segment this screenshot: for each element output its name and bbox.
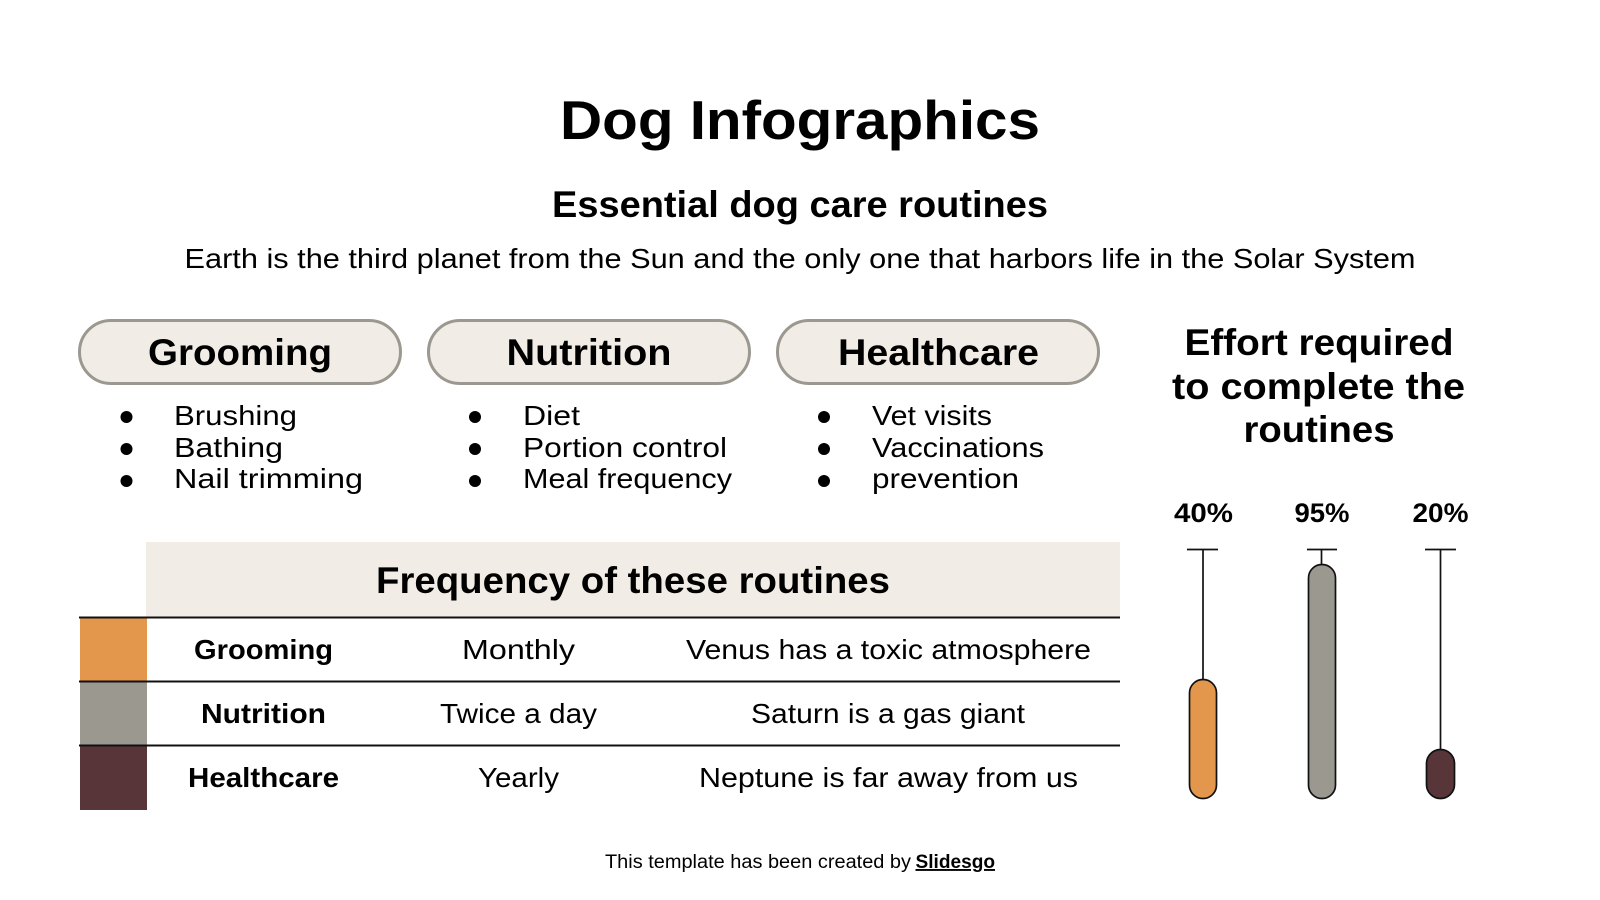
- subtitle: Essential dog care routines: [552, 184, 1048, 225]
- panel: healthcare: [778, 320, 1098, 494]
- row: healthcare: Neptune is far away from us: [699, 762, 1078, 793]
- gauge: healthcare 20%: [1412, 498, 1468, 798]
- heading: effort required: [1172, 322, 1465, 450]
- description: Earth is the third planet from the Sun and the only one that harbors life in the Solar System: [184, 243, 1416, 274]
- list: grooming tasks: Bathing: [174, 432, 283, 463]
- row: nutrition: Nutrition: [201, 698, 326, 729]
- list: nutrition tasks: Meal frequency: [523, 463, 732, 494]
- title: Dog Infographics: [560, 89, 1040, 151]
- gauge: nutrition 95%: [1294, 498, 1350, 798]
- gauge: healthcare 20%: 20%: [1412, 498, 1468, 528]
- pill: healthcare: Healthcare: [838, 332, 1039, 373]
- panel: grooming: [80, 320, 400, 494]
- row: grooming: [194, 634, 1091, 665]
- row: nutrition: Twice a day: [440, 698, 597, 729]
- heading: effort required: routines: [1244, 409, 1394, 450]
- row: healthcare: Yearly: [478, 762, 559, 793]
- list: grooming tasks: Nail trimming: [174, 463, 363, 494]
- footer credit: This template has been created by: [605, 852, 912, 873]
- gauge: nutrition 95%: 95%: [1294, 498, 1350, 528]
- row: nutrition: Saturn is a gas giant: [751, 698, 1025, 729]
- table header: Frequency of these routines: [376, 560, 890, 601]
- gauge: grooming 40%: [1174, 498, 1233, 798]
- list: nutrition tasks: Portion control: [523, 432, 727, 463]
- color swatch: grooming: [80, 617, 147, 681]
- row: grooming: Venus has a toxic atmosphere: [686, 634, 1091, 665]
- pill: nutrition: Nutrition: [506, 332, 672, 373]
- row: grooming: Monthly: [462, 634, 575, 665]
- color swatch: healthcare: [80, 745, 147, 810]
- list: healthcare tasks: prevention: [872, 463, 1019, 494]
- color swatch: nutrition: [80, 681, 147, 745]
- list: grooming tasks: [120, 400, 363, 494]
- row: grooming: Grooming: [194, 634, 333, 665]
- pill: grooming: [80, 320, 400, 384]
- row: healthcare: [188, 762, 1078, 793]
- list: healthcare tasks: Vaccinations: [872, 432, 1044, 463]
- list: nutrition tasks: [469, 400, 732, 494]
- table: frequency of routines: [79, 542, 1120, 810]
- table header: [146, 542, 1120, 617]
- heading: effort required: to complete the: [1172, 366, 1465, 407]
- list: healthcare tasks: [818, 400, 1044, 494]
- row: nutrition: [201, 698, 1025, 729]
- list: healthcare tasks: Vet visits: [872, 400, 992, 431]
- list: grooming tasks: Brushing: [174, 400, 297, 431]
- pill: healthcare: [778, 320, 1098, 384]
- pill: nutrition: [428, 320, 750, 384]
- list: nutrition tasks: Diet: [523, 400, 580, 431]
- gauge: grooming 40%: 40%: [1174, 498, 1233, 528]
- panel: nutrition: [428, 320, 750, 494]
- row: healthcare: Healthcare: [188, 762, 339, 793]
- pill: grooming: Grooming: [148, 332, 332, 373]
- chart: effort gauges: [1174, 498, 1468, 798]
- heading: effort required: Effort required: [1184, 322, 1454, 363]
- footer credit: Slidesgo: [916, 852, 995, 873]
